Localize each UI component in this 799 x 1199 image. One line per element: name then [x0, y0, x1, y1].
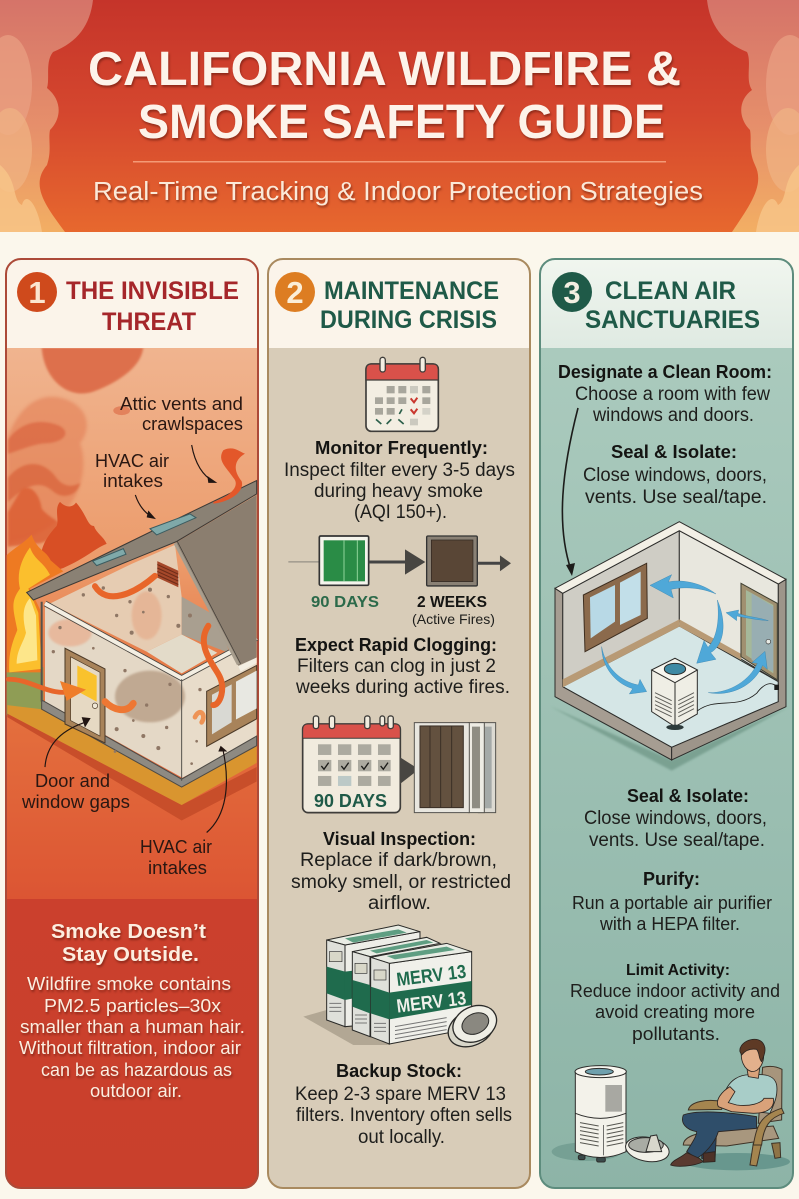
seal and isolate text: Seal & Isolate: [611, 442, 737, 462]
soot particles [52, 586, 202, 765]
title [88, 43, 681, 149]
door [741, 583, 777, 680]
tower air purifier [575, 1066, 626, 1162]
icons in panel 2 [288, 357, 511, 813]
expect rapid clogging text: Expect Rapid Clogging: [295, 635, 497, 655]
illustration labels: Attic vents and [120, 394, 243, 414]
callout: smoke doesn't stay outside: can be as hazardous as [41, 1059, 232, 1080]
monitor frequently text: (AQI 150+). [354, 502, 447, 523]
baseboards [563, 619, 679, 687]
box labels [395, 962, 467, 1018]
man [671, 1039, 777, 1166]
expect rapid clogging text: Filters can clog in just 2 [297, 656, 496, 677]
interior [50, 545, 182, 652]
illustration: man relaxing beside purifier [552, 1039, 790, 1170]
callout arrows [45, 445, 226, 832]
panel 1 heading: THE INVISIBLE [66, 277, 239, 305]
backup stock text: Keep 2-3 spare MERV 13 [295, 1084, 506, 1105]
limit activity text: Reduce indoor activity and [570, 981, 780, 1001]
panel 3 heading [585, 277, 760, 334]
arrow to clean room [562, 408, 578, 576]
backup stock text: out locally. [358, 1127, 445, 1148]
expect rapid clogging text [295, 635, 510, 698]
panel 1 number badge [17, 272, 57, 312]
box labels: MERV 13 [395, 962, 467, 991]
purify text: with a HEPA filter. [599, 914, 740, 934]
roof slab [27, 481, 257, 600]
second seal and isolate text: Seal & Isolate: [627, 786, 749, 806]
callout: smoke doesn't stay outside: smaller than a human hair. [20, 1016, 245, 1037]
power cord [698, 684, 777, 711]
illustration labels: HVAC air [95, 451, 169, 471]
ground [7, 714, 257, 820]
panel 1 heading [66, 277, 239, 336]
visual inspection text: Visual Inspection: [323, 829, 476, 849]
panel 3 number badge [552, 272, 592, 312]
illustration labels: intakes [148, 858, 207, 878]
seal and isolate text: vents. Use seal/tape. [585, 487, 767, 508]
middle box [352, 937, 440, 1037]
monitor frequently text: Inspect filter every 3-5 days [284, 460, 515, 481]
callout: smoke doesn't stay outside: Without filtration, indoor air [19, 1037, 241, 1058]
subtitle: Real-Time Tracking & Indoor Protection Strategies [93, 178, 703, 206]
filter timeline labels: (Active Fires) [412, 611, 495, 627]
title: CALIFORNIA WILDFIRE & [88, 43, 681, 96]
visual inspection text: Replace if dark/brown, [300, 850, 497, 871]
chair near arm [753, 1108, 784, 1145]
illustration labels: Door and [35, 771, 110, 791]
designate a clean room text [558, 362, 772, 426]
icon: MERV 13 filter boxes and tape [303, 925, 504, 1054]
seal and isolate text [583, 442, 767, 508]
box labels: MERV 13 [395, 988, 467, 1018]
attic vent [157, 561, 178, 587]
roof underside [175, 495, 257, 666]
panel 2 heading: DURING CRISIS [320, 306, 497, 334]
illustration labels: HVAC air [140, 837, 212, 857]
smoke and flames: left corner [0, 0, 93, 232]
90 days label on calendar: 90 DAYS [314, 791, 387, 811]
panel: the invisible threat [6, 259, 258, 1188]
panel 1 number badge: 1 [28, 275, 46, 310]
expect rapid clogging text: weeks during active fires. [295, 677, 510, 698]
walls and floor [555, 522, 786, 760]
second seal and isolate text [584, 786, 767, 851]
airflow arrows [602, 575, 768, 694]
air purifier [652, 658, 697, 727]
visual inspection text: airflow. [368, 893, 431, 914]
panel: clean air sanctuaries [540, 259, 793, 1188]
front box [371, 943, 472, 1044]
callout: smoke doesn't stay outside: outdoor air. [90, 1080, 182, 1101]
smoke and flames: right corner [707, 0, 799, 232]
illustration labels: intakes [103, 471, 163, 491]
roof vents [93, 514, 196, 566]
clean room illustration [551, 522, 789, 771]
monitor frequently text: Monitor Frequently: [315, 438, 488, 458]
purify text: Run a portable air purifier [572, 893, 772, 913]
callout: smoke doesn't stay outside: Smoke Doesn’t [51, 921, 206, 943]
panel 3 heading: SANCTUARIES [585, 306, 760, 334]
designate a clean room text: Choose a room with few [575, 384, 770, 405]
callout: smoke doesn't stay outside [19, 921, 245, 1101]
designate a clean room text: windows and doors. [592, 405, 754, 426]
second seal and isolate text: Close windows, doors, [584, 808, 767, 829]
visual inspection text: smoky smell, or restricted [291, 872, 511, 893]
illustration labels [21, 394, 243, 878]
walls [45, 607, 182, 777]
backup stock text: Backup Stock: [336, 1061, 462, 1081]
filter timeline labels: 2 WEEKS [417, 594, 487, 611]
icon: filter progression [288, 536, 511, 586]
window [583, 563, 647, 652]
illustration labels: crawlspaces [142, 414, 243, 434]
callout: smoke doesn't stay outside: PM2.5 particles–30x [44, 995, 222, 1016]
tape roll [441, 999, 504, 1054]
purify text: Purify: [643, 869, 700, 889]
icon: inspection calendar [366, 357, 438, 431]
armchair [683, 1066, 782, 1166]
illustration labels: window gaps [21, 792, 130, 812]
designate a clean room text: Designate a Clean Room: [558, 362, 772, 382]
seal and isolate text: Close windows, doors, [583, 465, 767, 486]
backup stock text: filters. Inventory often sells [296, 1105, 512, 1126]
visual inspection text [291, 829, 511, 914]
panel 3 number badge: 3 [563, 275, 581, 310]
floor shadow [551, 707, 789, 771]
panel 3 heading: CLEAN AIR [605, 277, 736, 305]
panel 2 heading [320, 277, 499, 334]
panel: maintenance during crisis [268, 259, 530, 1188]
door [65, 648, 105, 743]
window [207, 665, 257, 746]
filter timeline labels [311, 594, 495, 627]
foundation strip [42, 700, 257, 787]
purify text [572, 869, 772, 934]
smoke plume [8, 347, 143, 547]
monitor frequently text [284, 438, 515, 523]
panel 2 number badge [275, 272, 315, 312]
header banner [0, 0, 799, 232]
limit activity text: Limit Activity: [626, 962, 730, 979]
smoke intrusion arrows [8, 576, 222, 722]
second seal and isolate text: vents. Use seal/tape. [589, 830, 765, 851]
panel 2 heading: MAINTENANCE [324, 277, 499, 305]
roof smoke wisp [213, 448, 245, 504]
backup stock text [295, 1061, 512, 1148]
panel 1 heading: THREAT [102, 308, 196, 336]
back box [327, 925, 420, 1027]
removed filter [624, 1134, 671, 1165]
limit activity text: avoid creating more [595, 1002, 755, 1022]
wall rim [45, 603, 257, 678]
monitor frequently text: during heavy smoke [314, 481, 483, 502]
house cutaway illustration [7, 347, 257, 832]
title: SMOKE SAFETY GUIDE [138, 96, 665, 149]
callout: smoke doesn't stay outside: Wildfire smoke contains [27, 973, 231, 994]
callout: smoke doesn't stay outside: Stay Outside. [62, 944, 199, 966]
limit activity text: pollutants. [632, 1024, 720, 1044]
icon: 90 day calendar and filters [303, 716, 496, 813]
flames [7, 502, 107, 672]
floor shadows [552, 1142, 622, 1161]
filter timeline labels: 90 DAYS [311, 594, 379, 611]
limit activity text [570, 962, 780, 1044]
panel 2 number badge: 2 [286, 275, 304, 310]
green ground [7, 667, 43, 715]
